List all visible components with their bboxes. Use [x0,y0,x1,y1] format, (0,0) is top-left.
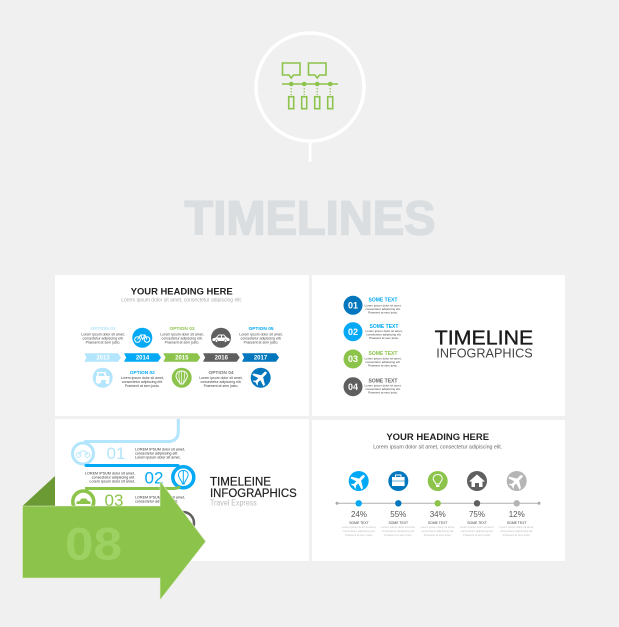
panel title [435,327,533,360]
road: step 03 [73,486,180,512]
ribbon number: 08 [65,518,122,570]
step body text: LOREM IPSUM dolor sit amet, [135,496,185,500]
icon: plane [505,470,528,492]
panel: option timeline [55,275,309,416]
road: step 04 [172,512,194,534]
option labels: OPTION 02 [130,370,155,376]
arrows: years: 2015 [175,356,189,362]
list headings: SOME TEXT [370,324,398,330]
option body text: Lorem ipsum dolor sit amet, [199,376,243,380]
panel title: TIMELINE [435,327,533,349]
panel title: INFOGRAPHICS [210,488,297,500]
stat body text: consectetur adipiscing elit. [421,529,454,533]
option body text: consectetur adipiscing elit. [82,336,124,340]
list body text: consectetur adipiscing elit. [365,360,401,364]
step body text: consectetur adipiscing elit. [135,452,178,456]
list body text [364,304,403,394]
arrows: years: 2017 [254,356,268,362]
stat labels: SOME TEXT [467,521,487,525]
percentages: 24% [351,510,367,519]
option labels: OPTION 03 [169,326,195,332]
stat labels: SOME TEXT [428,521,447,525]
option body text: Lorem ipsum dolor sit amet, [239,332,283,336]
list body text: Lorem ipsum dolor sit amet, [364,356,402,360]
percentages [351,510,525,519]
icon: bicycle [132,328,152,348]
list body text: Praesent at sem justo. [368,390,398,394]
list body text: Lorem ipsum dolor sit amet, [364,384,402,388]
arrows: years: 2014 [136,356,150,362]
stat body text: Praesent at sem justo. [384,533,412,537]
step body text: Lorem ipsum dolor sit amet, [135,456,180,460]
subheading: Lorem ipsum dolor sit amet, consectetur adipiscing elit. [121,298,243,304]
option labels: OPTION 04 [208,370,234,376]
option body text: Praesent at sem justo. [244,340,278,344]
option labels: OPTION 05 [248,326,274,332]
step body text: LOREM IPSUM dolor sit amet, [85,472,135,476]
panel: percent timeline [312,420,565,561]
list body text: consectetur adipiscing elit. [366,332,402,336]
icon: plane [249,366,272,389]
panel: winding road [55,419,309,561]
numbered circles: 02 [348,327,358,337]
stat body text: consectetur adipiscing elit. [382,529,415,533]
icon: briefcase [388,471,408,491]
stat body text: consectetur adipiscing elit. [343,529,376,533]
list headings: SOME TEXT [369,378,397,384]
step body text: Lorem ipsum dolor sit amet, [90,480,135,484]
stat body text: Lorem ipsum dolor sit amet, [499,525,534,529]
stat body text [342,525,534,537]
step numbers: 03 [105,491,123,510]
heading: YOUR HEADING HERE [386,432,489,443]
icon: light bulb [428,471,448,491]
icon: car [211,328,231,348]
step numbers [105,444,163,510]
list body text: Lorem ipsum dolor sit amet, [364,304,402,308]
option labels: OPTION 01 [90,326,116,332]
step numbers: 01 [107,444,125,463]
road: step 01 [72,419,178,464]
option body text [81,332,283,388]
option body text: Praesent at sem justo. [204,384,238,388]
stat body text: Lorem ipsum dolor sit amet, [381,525,416,529]
icon: house [467,471,487,491]
stat body text: consectetur adipiscing elit. [500,529,533,533]
list body text: Praesent at sem justo. [369,336,399,340]
panel title [210,476,297,508]
road: step 02 [86,466,194,488]
step numbers: 02 [145,469,163,488]
percentages: 75% [469,510,485,519]
icon: timeline badge [256,33,364,162]
percentages: 12% [509,510,525,519]
list body text: Lorem ipsum dolor sit amet, [365,329,403,333]
heading: YOUR HEADING HERE [131,286,233,298]
option body text: consectetur adipiscing elit. [240,336,282,340]
title: TIMELINES [184,192,436,246]
list body text: Praesent at sem justo. [368,310,398,314]
option body text: Praesent at sem justo. [86,340,120,344]
arrows: years [84,353,279,362]
stat body text: Lorem ipsum dolor sit amet, [342,525,376,529]
list body text: consectetur adipiscing elit. [365,307,401,311]
arrows: years: 2016 [215,356,229,362]
icon: tractor [93,368,113,388]
panel title: Travel Express [210,498,257,508]
list body text: consectetur adipiscing elit. [365,387,401,391]
panel title: TIMELEINE [210,476,271,488]
option body text: Praesent at sem justo. [125,384,160,388]
numbered circles: 04 [348,382,358,392]
stat body text: Lorem ipsum dolor sit amet, [420,525,455,529]
stat labels: SOME TEXT [507,521,526,525]
step body text [85,448,185,504]
option body text: Lorem ipsum dolor sit amet, [160,332,204,336]
panel: numbered list [312,275,565,416]
stat labels: SOME TEXT [389,521,408,525]
stat body text: Praesent at sem justo. [503,533,531,537]
numbered circles: 03 [348,354,358,364]
stat body text: Praesent at sem justo. [424,533,452,537]
percentages: 55% [390,510,406,519]
option body text: consectetur adipiscing elit. [122,380,163,384]
numbered circles [344,296,362,396]
arrows: years: 2013 [96,356,110,362]
option body text: Praesent at sem justo. [165,340,199,344]
ribbon arrow [22,476,206,600]
step body text: consectetur adipiscing elit. [135,500,178,504]
stat labels: SOME TEXT [349,521,369,525]
numbered circles: 01 [348,300,358,310]
stat body text: Praesent at sem justo. [345,533,373,537]
stat body text: consectetur adipiscing elit. [461,529,494,533]
list headings [369,298,398,384]
stat body text: Lorem ipsum dolor sit amet, [460,525,494,529]
option labels [90,326,274,376]
stat labels [349,521,526,525]
icon: plane [347,470,370,492]
icon: balloon [172,368,192,388]
stat body text: Praesent at sem justo. [463,533,491,537]
option body text: Lorem ipsum dolor sit amet, [81,332,125,336]
list body text: Praesent at sem justo. [368,364,398,368]
option body text: consectetur adipiscing elit. [161,336,203,340]
subheading: Lorem ipsum dolor sit amet, consectetur adipiscing elit. [373,444,503,450]
list headings: SOME TEXT [369,298,397,304]
percentages: 34% [430,510,446,519]
list headings: SOME TEXT [369,351,397,357]
timeline axis [336,500,540,506]
step body text: consectetur adipiscing elit. [92,476,135,480]
option body text: Lorem ipsum dolor sit amet, [121,376,164,380]
panel title: INFOGRAPHICS [436,345,533,360]
step body text: LOREM IPSUM dolor sit amet, [135,448,185,452]
option body text: consectetur adipiscing elit. [200,380,242,384]
